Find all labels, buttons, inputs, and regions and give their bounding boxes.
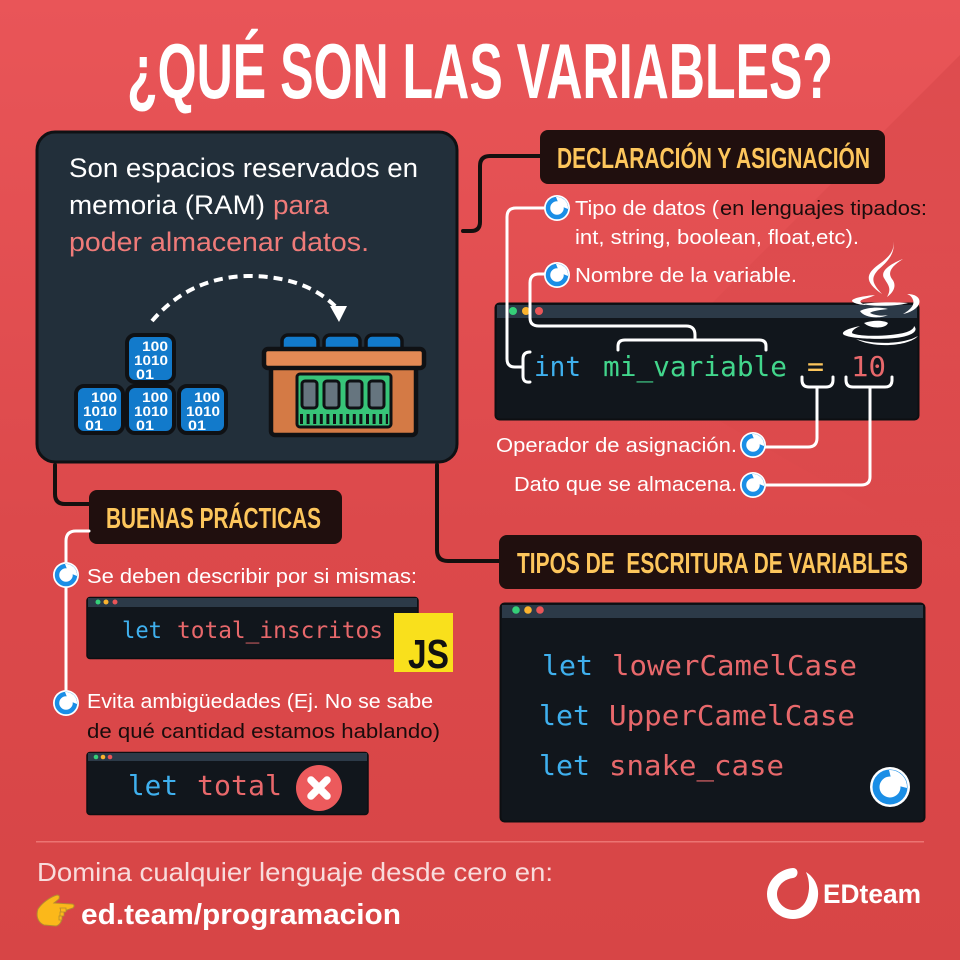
code: int mi_variable = 10: = xyxy=(807,350,824,383)
panel: definition xyxy=(37,132,457,462)
arrow: data to memory xyxy=(152,276,347,322)
icon: binary data blocks xyxy=(76,335,226,433)
heading: writing types xyxy=(499,535,922,589)
text: self description: Se deben describir por si mismas: xyxy=(87,566,417,588)
icon: JavaScript logo: JS xyxy=(408,631,449,677)
text: data type: Tipo de datos ( xyxy=(575,198,719,220)
callout lines: declaration xyxy=(507,208,892,485)
code lines: UpperCamelCase xyxy=(609,699,855,732)
icon: RAM memory box xyxy=(264,335,424,435)
code: int mi_variable = 10: mi_variable xyxy=(603,350,787,384)
icon: EDteam badge xyxy=(870,767,910,807)
text: assignment operator: Operador de asignación. xyxy=(496,435,737,457)
timeline line: good practices xyxy=(66,531,89,703)
bullet: self description xyxy=(53,562,79,588)
icon: binary data blocks: 01 xyxy=(85,417,103,433)
text: data type: en lenguajes tipados: xyxy=(720,198,927,220)
heading: declaration and assignment xyxy=(540,130,885,184)
text: stored data: Dato que se almacena. xyxy=(514,474,737,496)
definition text: poder almacenar datos. xyxy=(69,227,369,257)
code lines: let xyxy=(542,649,593,682)
heading: good practices xyxy=(89,490,342,544)
logo: EDteam: EDteam xyxy=(823,879,921,909)
icon: binary data blocks: 100 xyxy=(142,389,168,405)
icon: binary data blocks: 100 xyxy=(142,338,168,354)
text: variable name: Nombre de la variable. xyxy=(575,265,797,287)
text: ambiguity: Evita ambigüedades (Ej. No se sabe xyxy=(87,691,433,713)
connector: panel to declaration heading xyxy=(463,156,540,231)
text: data type xyxy=(575,198,927,249)
text: ambiguity: de qué cantidad estamos hablando) xyxy=(87,721,440,743)
footer link: ed.team/programacion xyxy=(81,899,401,931)
icon: binary data blocks: 01 xyxy=(136,417,154,433)
icon: binary data blocks: 1010 xyxy=(134,352,168,368)
code lines: lowerCamelCase xyxy=(612,649,857,682)
icon: binary data blocks: 1010 xyxy=(134,403,168,419)
footer divider xyxy=(36,841,924,842)
definition text: para xyxy=(273,190,330,220)
icon: binary data blocks: 1010 xyxy=(186,403,220,419)
definition text: memoria (RAM) xyxy=(69,190,265,220)
connector: panel to writing types heading xyxy=(437,465,500,561)
icon: java logo xyxy=(843,238,920,345)
icon: JavaScript logo xyxy=(394,613,453,677)
code window: total: let xyxy=(128,769,178,802)
icon: binary data blocks: 100 xyxy=(91,389,117,405)
icon: binary data blocks: 100 xyxy=(194,389,220,405)
code window: declaration xyxy=(496,304,918,420)
bullet: variable name xyxy=(544,262,570,288)
bullet: data type xyxy=(544,195,570,221)
icon: pointing hand xyxy=(37,895,74,926)
bullet: stored data xyxy=(740,472,766,498)
bullet: assignment operator xyxy=(740,432,766,458)
code lines xyxy=(539,649,857,783)
code: int mi_variable = 10 xyxy=(534,350,886,384)
code: int mi_variable = 10: 10 xyxy=(851,350,886,383)
code window: total_inscritos: total_inscritos xyxy=(177,618,383,644)
text: ambiguity xyxy=(87,691,440,743)
code window: total_inscritos xyxy=(87,598,418,658)
code lines: snake_case xyxy=(609,749,784,783)
code window: total: total xyxy=(197,769,282,802)
definition text: Son espacios reservados en xyxy=(69,153,418,183)
icon: binary data blocks: 01 xyxy=(136,366,154,382)
bullet: ambiguity xyxy=(53,690,79,716)
icon: binary data blocks: 01 xyxy=(188,417,206,433)
icon: error cross xyxy=(296,765,342,811)
logo: EDteam xyxy=(767,868,921,919)
footer text: Domina cualquier lenguaje desde cero en: xyxy=(37,857,553,887)
text: data type: int, string, boolean, float,etc). xyxy=(575,227,859,249)
code lines: let xyxy=(539,749,590,782)
code window: total xyxy=(87,752,368,814)
definition text xyxy=(69,153,418,257)
connector: panel to good practices heading xyxy=(55,465,90,504)
code: int mi_variable = 10: int xyxy=(534,350,581,383)
code window: naming styles xyxy=(500,604,924,822)
code lines: let xyxy=(539,699,590,732)
heading: good practices: BUENAS PRÁCTICAS xyxy=(106,501,321,535)
code window: total_inscritos: let xyxy=(122,618,162,644)
icon: binary data blocks: 1010 xyxy=(83,403,117,419)
